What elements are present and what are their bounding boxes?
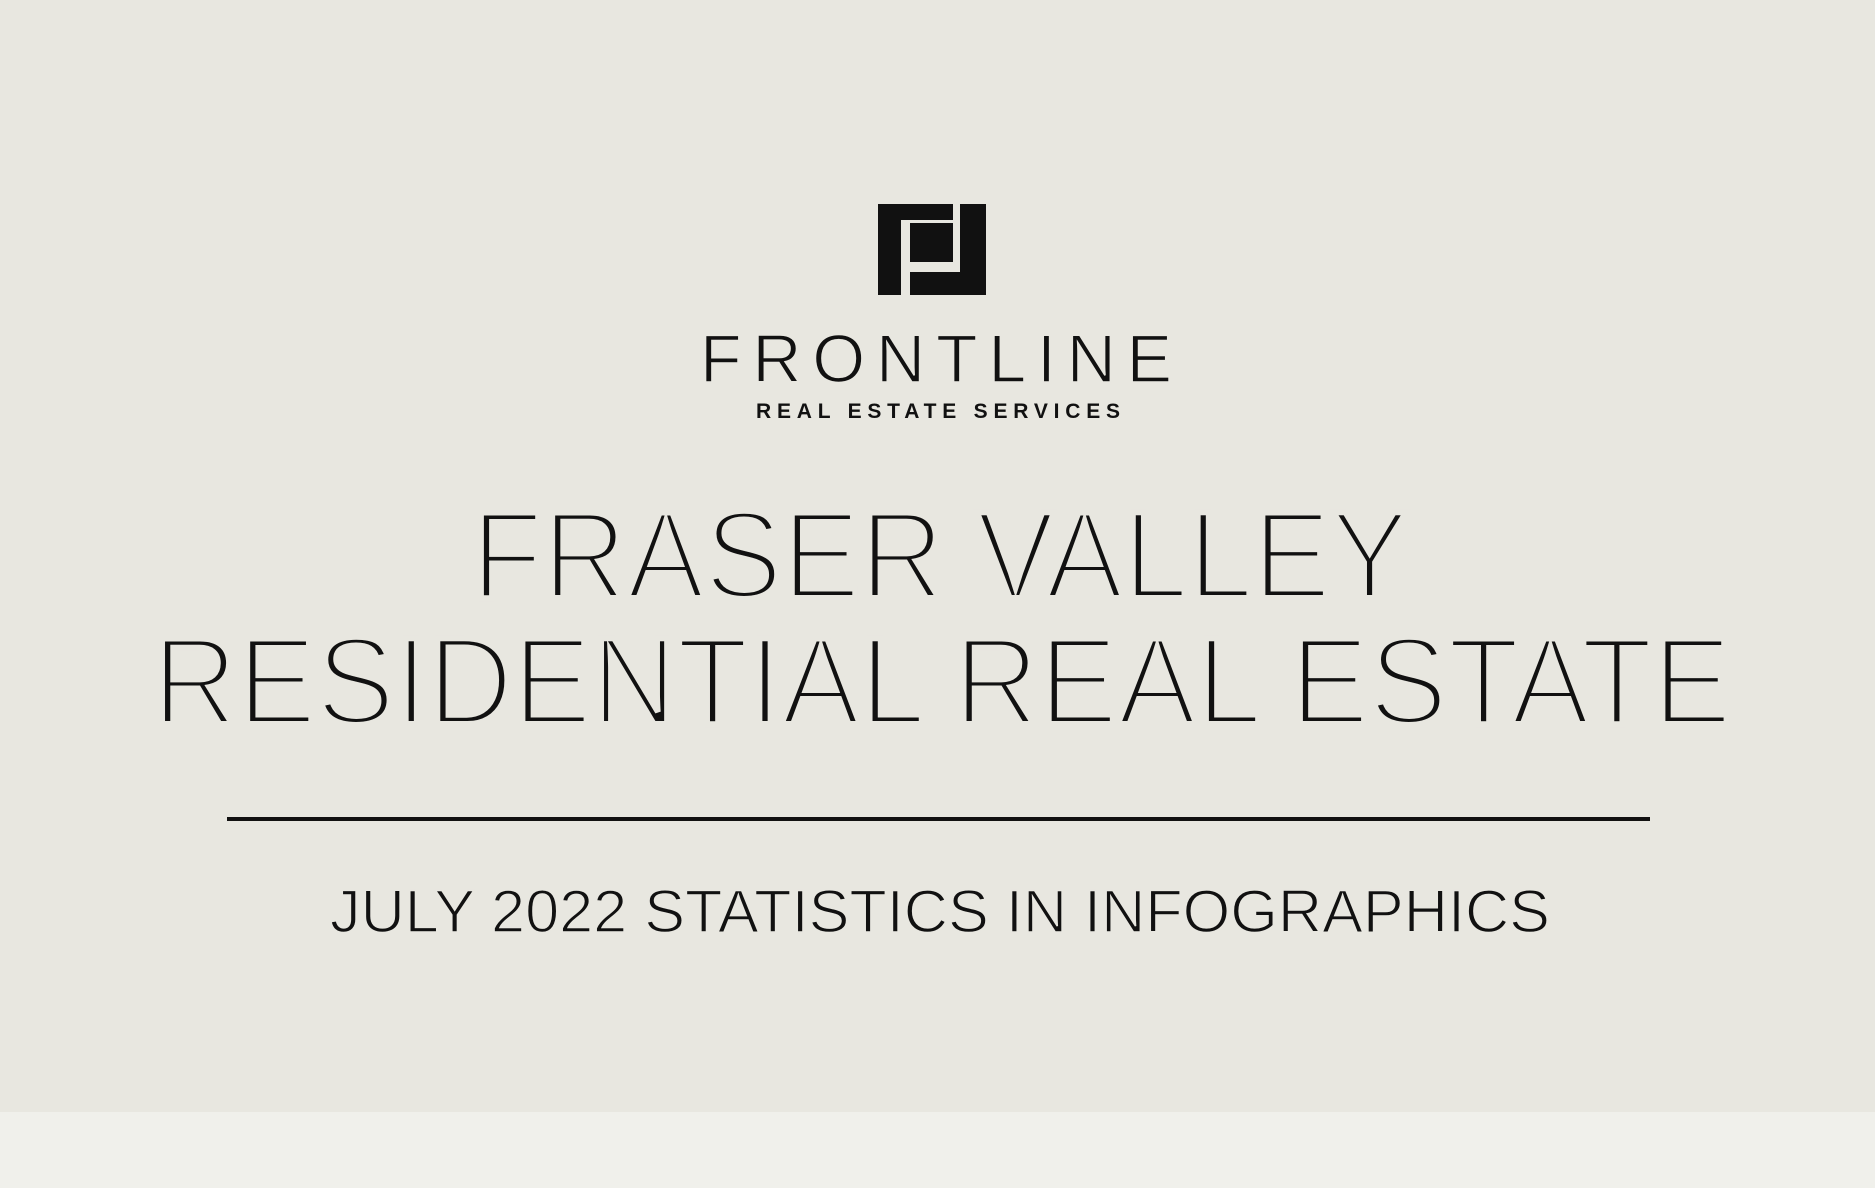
logo: frontline [700,204,1172,423]
title: RESIDENTIAL REAL ESTATE [152,613,1732,751]
title [152,487,1732,751]
logo wordmark: FRONTLINE [700,321,1172,397]
title: FRASER VALLEY [472,487,1408,625]
logo tagline: REAL ESTATE SERVICES [756,400,1120,423]
icon: logo mark [878,204,986,295]
subtitle: JULY 2022 STATISTICS IN INFOGRAPHICS [330,878,1550,945]
